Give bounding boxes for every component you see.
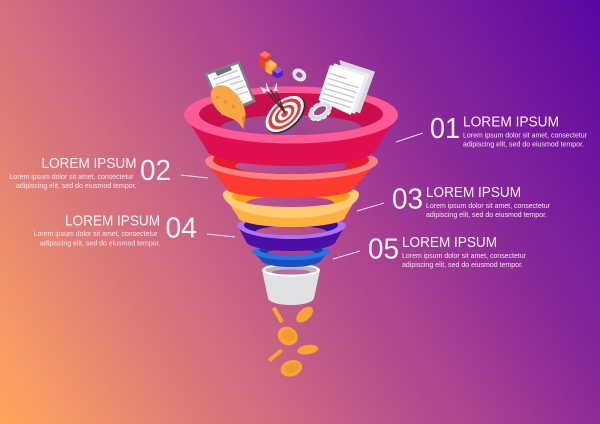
callout 03: adipiscing elit, sed do eiusmod tempor. (426, 211, 547, 219)
funnel ring 5: blue (252, 248, 330, 267)
callout 04: Lorem ipsum dolor sit amet, consectetur (34, 230, 158, 238)
icon: speech bubble (211, 85, 246, 129)
callout 05: Lorem ipsum dolor sit amet, consectetur (402, 252, 527, 260)
callout 01: 01 (430, 113, 460, 145)
callout 03: LOREM IPSUM (426, 184, 521, 201)
funnel ring 3: yellow (223, 189, 359, 228)
coin 4 (296, 344, 319, 356)
callout 04: adipiscing elit, sed do eiusmod tempor. (40, 240, 161, 248)
coin 5 (268, 348, 283, 362)
callout 03 (357, 184, 551, 219)
coin 1 (272, 307, 284, 323)
callout 02: adipiscing elit, sed do eiusmod tempor. (16, 182, 137, 190)
callout 05: adipiscing elit, sed do eiusmod tempor. (402, 261, 523, 269)
funnel ring 4: violet (237, 221, 346, 251)
white cup funnel base (262, 264, 320, 305)
coin 3 (274, 323, 301, 349)
callout 01: adipiscing elit, sed do eiusmod tempor. (463, 140, 584, 148)
coin 2 (293, 304, 316, 326)
callout 01: LOREM IPSUM (463, 114, 559, 130)
callout 04: 04 (166, 212, 197, 244)
callout 02: Lorem ipsum dolor sit amet, consectetur (10, 173, 134, 181)
icon: large gear (306, 98, 334, 124)
callout 02 (10, 155, 208, 190)
callout 01 (396, 113, 588, 148)
funnel ring 2: red (205, 155, 378, 198)
callout 01: Lorem ipsum dolor sit amet, consectetur (463, 132, 588, 140)
funnel ring 1: top crimson (184, 86, 398, 166)
callout 05: 05 (368, 234, 399, 266)
callout 03: Lorem ipsum dolor sit amet, consectetur (426, 202, 551, 210)
callout 05 (333, 234, 527, 269)
callout 05: LOREM IPSUM (402, 234, 497, 251)
icon: target with arrows (259, 82, 312, 141)
coin 6 (278, 357, 304, 379)
icon: small gear (290, 66, 309, 84)
callout 02: LOREM IPSUM (42, 155, 136, 172)
falling coins (268, 304, 319, 379)
callout 04: LOREM IPSUM (65, 212, 160, 230)
callout 03: 03 (392, 184, 423, 216)
callout 04 (34, 212, 235, 248)
icons rising from the funnel (204, 51, 375, 141)
callout 02: 02 (140, 155, 171, 187)
icon: clipboard (204, 61, 256, 116)
icon: document stack (318, 60, 375, 115)
icon: stacked blocks chart (259, 51, 283, 79)
